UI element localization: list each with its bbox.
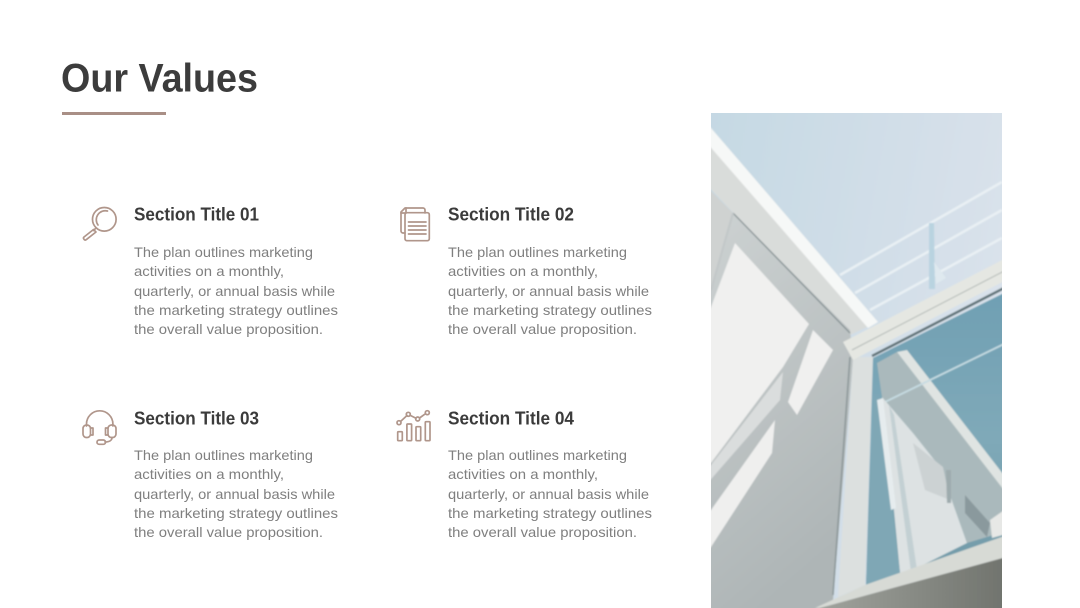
body text 01 — [134, 244, 338, 337]
body text 04: The plan outlines marketing — [448, 447, 627, 463]
body text 02: the marketing strategy outlines — [448, 302, 652, 318]
body text 04: the overall value proposition. — [448, 524, 637, 540]
icon: bar and line chart — [397, 411, 430, 441]
body text 01: The plan outlines marketing — [134, 244, 313, 260]
body text 04 — [448, 447, 652, 540]
panel: section 01 — [84, 204, 338, 337]
panel: section 03 — [83, 408, 338, 540]
title underline — [62, 112, 166, 115]
body text 01: quarterly, or annual basis while — [134, 283, 335, 299]
body text 02: The plan outlines marketing — [448, 244, 627, 260]
body text 02: activities on a monthly, — [448, 263, 598, 279]
body text 02: the overall value proposition. — [448, 321, 637, 337]
body text 03 — [134, 447, 338, 540]
heading 02: Section Title 02 — [448, 204, 574, 224]
body text 03: quarterly, or annual basis while — [134, 486, 335, 502]
body text 03: the overall value proposition. — [134, 524, 323, 540]
body text 03: The plan outlines marketing — [134, 447, 313, 463]
body text 04: activities on a monthly, — [448, 466, 598, 482]
body text 03: the marketing strategy outlines — [134, 505, 338, 521]
body text 02 — [448, 244, 652, 337]
panel: section 02 — [401, 204, 652, 337]
body text 03: activities on a monthly, — [134, 466, 284, 482]
title: Our Values — [61, 56, 258, 100]
body text 01: the marketing strategy outlines — [134, 302, 338, 318]
icon: headset — [83, 411, 116, 444]
heading 03: Section Title 03 — [134, 408, 259, 428]
heading 01: Section Title 01 — [134, 204, 259, 224]
photo: building corner against sky — [700, 100, 1014, 608]
body text 01: activities on a monthly, — [134, 263, 284, 279]
icon: documents — [401, 208, 429, 241]
body text 02: quarterly, or annual basis while — [448, 283, 649, 299]
icon: magnifier — [84, 208, 116, 240]
panel: section 04 — [397, 408, 652, 540]
body text 04: the marketing strategy outlines — [448, 505, 652, 521]
body text 04: quarterly, or annual basis while — [448, 486, 649, 502]
heading 04: Section Title 04 — [448, 408, 574, 428]
body text 01: the overall value proposition. — [134, 321, 323, 337]
